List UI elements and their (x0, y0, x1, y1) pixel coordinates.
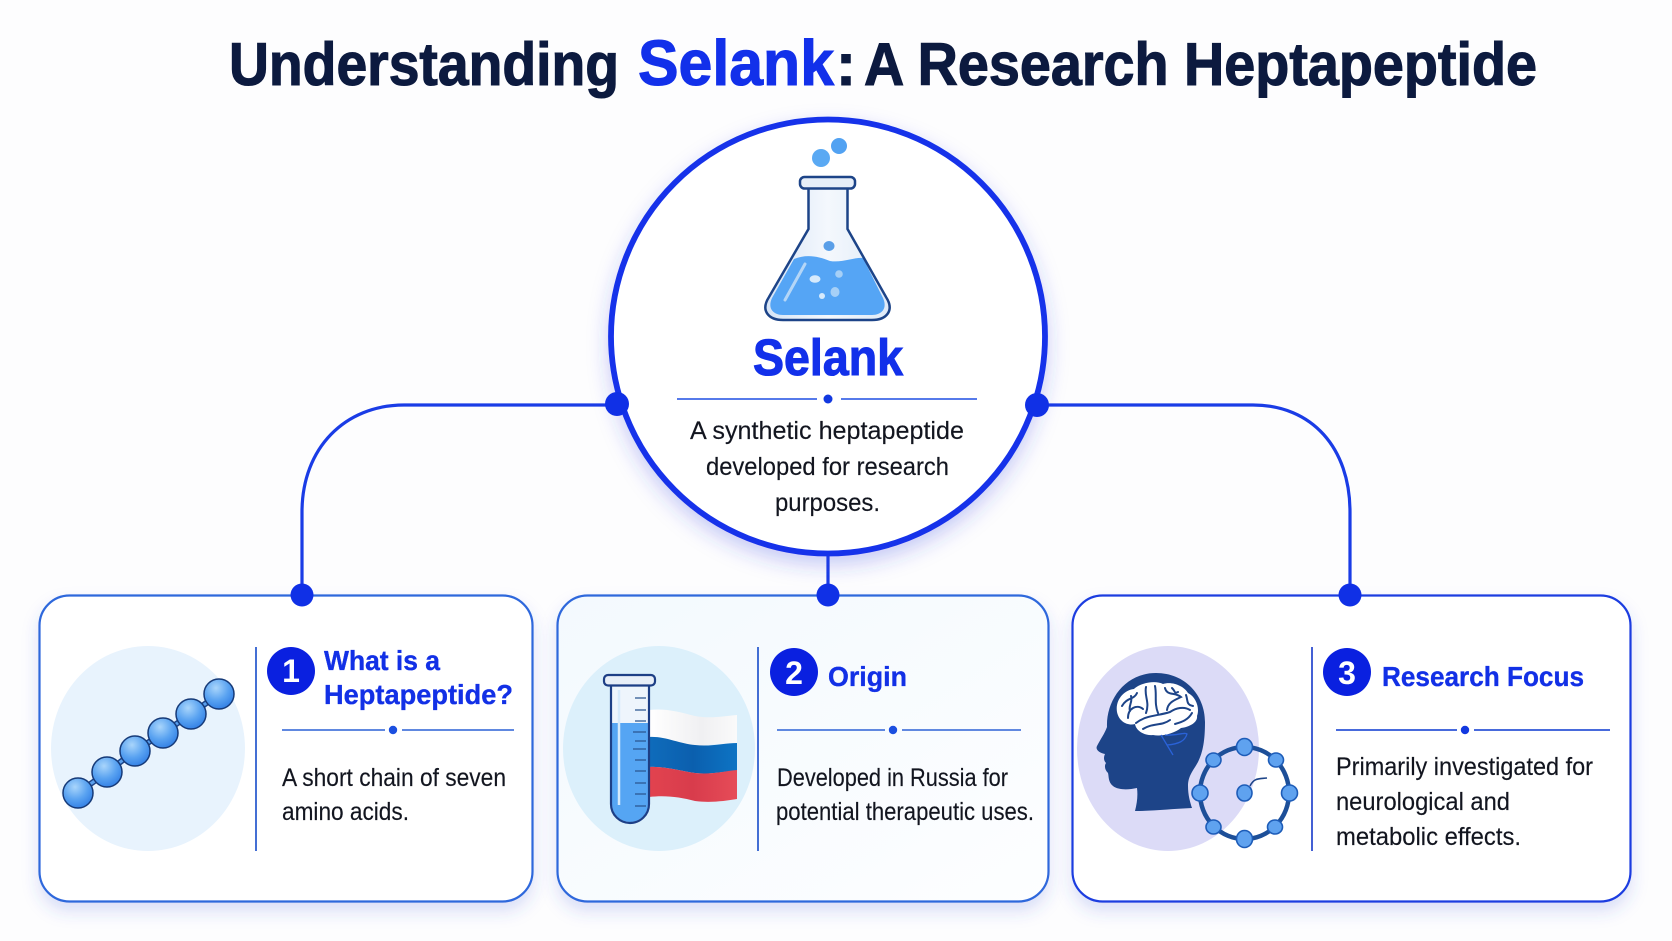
connector: right branch (1037, 405, 1350, 595)
heading: Origin: Origin (828, 661, 907, 692)
text: Selank description: developed for research (706, 453, 949, 481)
icon: head with brain and ring molecule (1077, 646, 1298, 851)
heading: What is a Heptapeptide? (324, 645, 513, 710)
heading: Selank: Selank (753, 329, 904, 386)
title: : (836, 31, 856, 98)
title: A Research Heptapeptide (864, 31, 1537, 98)
divider with dot (677, 394, 977, 404)
divider with dot (1336, 726, 1610, 734)
badge: number 1: 1 (282, 653, 300, 689)
icon: amino acid chain (51, 646, 245, 851)
text: research focus description (1336, 753, 1593, 851)
heading: What is a Heptapeptide?: What is a (324, 645, 440, 676)
text: origin description: Developed in Russia for (777, 764, 1008, 792)
badge: number 3: 3 (1338, 655, 1356, 691)
connector node: card 3 (1338, 584, 1362, 606)
badge: number 3 (1323, 648, 1371, 696)
badge: number 2: 2 (785, 655, 803, 691)
badge: number 2 (770, 648, 818, 696)
icon: flask with bubbles (765, 138, 890, 320)
panel: Research Focus (1072, 596, 1630, 902)
text: research focus description: metabolic effects. (1336, 823, 1521, 851)
connector: center stem (826, 555, 830, 595)
text: origin description: potential therapeutic uses. (776, 798, 1034, 826)
icon: test tube and Russian flag (563, 646, 755, 851)
connector node: circle left (605, 392, 629, 416)
heading: Research Focus: Research Focus (1382, 661, 1584, 692)
connector node: circle right (1025, 393, 1049, 417)
title (229, 27, 1537, 99)
text: origin description (776, 764, 1034, 826)
badge: number 1 (267, 647, 315, 695)
text: heptapeptide description: amino acids. (282, 798, 409, 826)
text: research focus description: neurological and (1336, 788, 1510, 816)
connector node: card 1 (290, 584, 314, 606)
divider with dot (282, 726, 514, 734)
text: Selank description (690, 417, 964, 517)
panel: central Selank circle (611, 120, 1045, 554)
text: Selank description: A synthetic heptapeptide (690, 417, 964, 445)
heading: What is a Heptapeptide?: Heptapeptide? (324, 679, 513, 710)
title: Selank (638, 27, 834, 99)
text: heptapeptide description (282, 764, 506, 826)
divider with dot (777, 726, 1021, 734)
panel: Origin (558, 596, 1048, 902)
panel: What is a Heptapeptide (40, 596, 532, 902)
title: Understanding (229, 31, 619, 98)
connector: left branch (302, 405, 617, 595)
text: Selank description: purposes. (775, 489, 880, 517)
connector node: card 2 (816, 584, 840, 606)
text: heptapeptide description: A short chain of seven (282, 764, 506, 792)
text: research focus description: Primarily investigated for (1336, 753, 1593, 781)
